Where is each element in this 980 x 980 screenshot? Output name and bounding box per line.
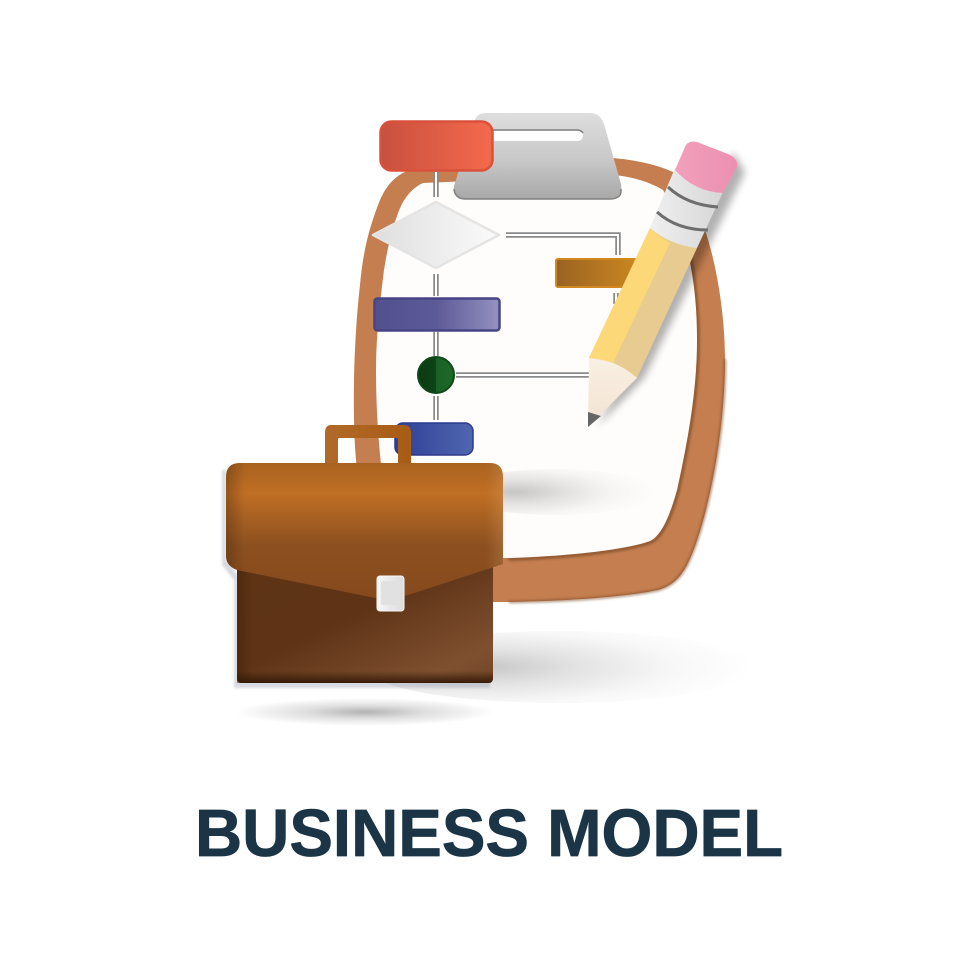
clipboard paper — [376, 175, 697, 558]
clipboard board — [354, 158, 725, 602]
flow node: blue box — [395, 423, 473, 455]
pencil tip — [588, 358, 637, 427]
clipboard clip — [454, 113, 621, 199]
pencil eraser — [675, 142, 737, 193]
briefcase side shadow — [222, 470, 490, 688]
briefcase handle — [325, 425, 411, 465]
paper shadow — [455, 469, 655, 515]
briefcase — [222, 425, 503, 688]
flow node: red start — [380, 122, 492, 170]
flow node: white diamond — [373, 202, 499, 268]
pencil — [588, 142, 745, 427]
flow node: purple box — [374, 298, 500, 330]
flow node: green circle — [418, 357, 454, 393]
ground shadow: briefcase — [235, 698, 495, 726]
flow node: orange box — [556, 259, 646, 287]
briefcase body — [237, 560, 493, 683]
briefcase flap — [226, 463, 503, 601]
flow connectors — [436, 172, 618, 420]
briefcase latch — [377, 576, 404, 611]
title: BUSINESS MODEL — [195, 796, 783, 871]
pencil wood barrel — [589, 228, 697, 378]
pencil ferrule — [650, 168, 723, 248]
ground shadow: clipboard — [365, 631, 755, 703]
pencil shadow — [598, 152, 745, 426]
clip slot — [470, 130, 583, 141]
